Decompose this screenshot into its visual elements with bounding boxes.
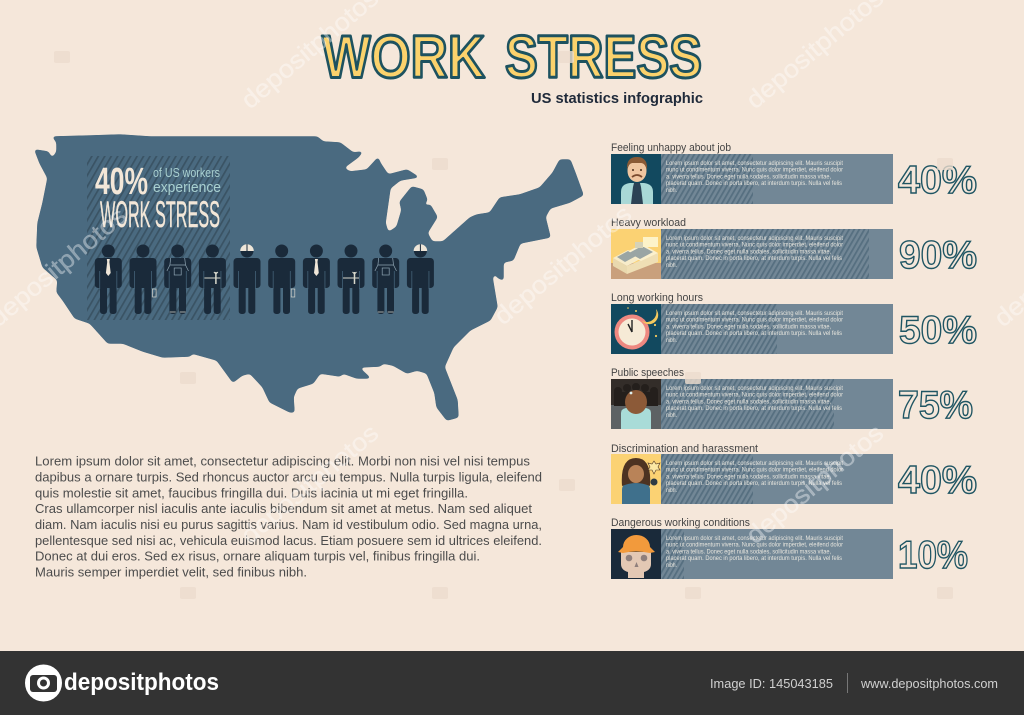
figure: worker with tools	[199, 244, 226, 314]
text block: body paragraph: quis molestie sit amet, faucibus fringilla dui. Duis lacinia ut mi eget fringilla.	[35, 485, 468, 500]
figure: worker in overalls	[164, 244, 191, 314]
text block: nibh.	[666, 337, 677, 344]
hatched share 50%	[661, 304, 777, 354]
panel: discrimination and harassment	[611, 443, 977, 504]
text block: nunc ut condimentum viverra. Nunc quis dolor imperdiet, eleifend dolor	[666, 317, 844, 324]
bar	[611, 454, 893, 504]
bar	[611, 154, 893, 204]
text block: Lorem ipsum dolor sit amet, consectetur adipiscing elit. Mauris suscipit	[666, 160, 843, 167]
value: 90%	[899, 234, 977, 277]
hatched share 90%	[661, 229, 869, 279]
bar	[611, 304, 893, 354]
text block: placerat quam. Donec in porta libero, at interdum turpis. Nulla vel felis	[666, 180, 842, 187]
worker figures row	[95, 244, 434, 314]
figure: office worker	[303, 244, 330, 314]
callout: experience: experience	[153, 179, 221, 196]
text block	[666, 160, 844, 194]
panel: long working hours	[611, 292, 977, 354]
text block: nibh.	[666, 487, 677, 494]
panel: public speeches	[611, 367, 973, 429]
text block: placerat quam. Donec in porta libero, at interdum turpis. Nulla vel felis	[666, 480, 842, 487]
value: 40%	[898, 459, 977, 502]
text block: nunc ut condimentum viverra. Nunc quis dolor imperdiet, eleifend dolor	[666, 392, 844, 399]
panel: heavy workload	[611, 217, 977, 279]
heading: Heavy workload	[611, 217, 686, 229]
text block: nibh.	[666, 262, 677, 269]
bar	[611, 529, 893, 579]
icon: sad office worker	[611, 154, 661, 204]
text block: placerat quam. Donec in porta libero, at interdum turpis. Nulla vel felis	[666, 330, 842, 337]
text block	[666, 310, 844, 344]
panel: dangerous working conditions	[611, 517, 968, 579]
title: WORK	[322, 24, 485, 90]
text block	[666, 385, 844, 419]
text block: Lorem ipsum dolor sit amet, consectetur adipiscing elit. Mauris suscipit	[666, 310, 843, 317]
footer bar	[0, 651, 1024, 715]
value: 50%	[899, 309, 977, 352]
icon: clock at night	[611, 304, 661, 354]
text block: body paragraph: dapibus a ornare turpis. Sed rhoncus auctor arcu eu tempus. Nulla turpis ligula, eleifend	[35, 470, 542, 484]
text block: nibh.	[666, 187, 677, 194]
text block: nunc ut condimentum viverra. Nunc quis dolor imperdiet, eleifend dolor	[666, 242, 844, 249]
value: 75%	[898, 384, 973, 427]
figure: worker with briefcase	[130, 244, 156, 314]
text block: Lorem ipsum dolor sit amet, consectetur adipiscing elit. Mauris suscipit	[666, 385, 843, 392]
title: STRESS	[505, 24, 702, 90]
figure: worker in hard hat	[234, 244, 260, 314]
text block: a. viverra tellus. Donec eget nulla sodales, sollicitudin massa vitae,	[666, 473, 831, 480]
text block: a. viverra tellus. Donec eget nulla sodales, sollicitudin massa vitae,	[666, 248, 831, 255]
map of the United States	[35, 135, 583, 420]
figure: worker in overalls	[372, 244, 399, 314]
hatched share 40%	[661, 454, 753, 504]
text block: a. viverra tellus. Donec eget nulla sodales, sollicitudin massa vitae,	[666, 548, 831, 555]
text block: body paragraph: pellentesque sed nisi ac, vehicula euismod lacus. Etiam posuere sem id ultrices eleifend.	[35, 533, 542, 548]
icon: paper stacks	[611, 229, 661, 279]
text block	[666, 535, 844, 569]
icon: harassed woman	[611, 454, 661, 504]
value: 10%	[898, 534, 968, 577]
subtitle: US statistics infographic	[531, 91, 703, 107]
heading: Dangerous working conditions	[611, 517, 750, 529]
text block: a. viverra tellus. Donec eget nulla sodales, sollicitudin massa vitae,	[666, 398, 831, 405]
text: WORK STRESS	[100, 194, 220, 235]
text block: Lorem ipsum dolor sit amet, consectetur adipiscing elit. Mauris suscipit	[666, 535, 843, 542]
panel: map callout	[87, 156, 230, 320]
panel: feeling unhappy about job	[611, 142, 977, 204]
text block: placerat quam. Donec in porta libero, at interdum turpis. Nulla vel felis	[666, 405, 842, 412]
text block	[666, 235, 844, 269]
text block: body paragraph: Mauris semper imperdiet velit, sed finibus nibh.	[35, 564, 307, 579]
watermarks: depositphotos	[741, 419, 889, 550]
text block: nunc ut condimentum viverra. Nunc quis dolor imperdiet, eleifend dolor	[666, 167, 844, 174]
text block: a. viverra tellus. Donec eget nulla sodales, sollicitudin massa vitae,	[666, 323, 831, 330]
text block: Lorem ipsum dolor sit amet, consectetur adipiscing elit. Mauris suscipit	[666, 460, 843, 467]
hatched share 40%	[661, 154, 753, 204]
text block: body paragraph: Donec at dui eros. Sed ex risus, ornare aliquam turpis vel, finibus fringilla dui.	[35, 549, 480, 564]
website: www.depositphotos.com	[860, 677, 998, 691]
text block: nunc ut condimentum viverra. Nunc quis dolor imperdiet, eleifend dolor	[666, 542, 844, 549]
figure: worker with tools	[338, 244, 364, 314]
icon: camera logo	[25, 664, 62, 702]
watermarks: depositphotos	[489, 200, 637, 331]
heading: Public speeches	[611, 367, 684, 379]
watermarks: depositphotos	[236, 419, 384, 550]
icon: speaker facing crowd	[611, 379, 661, 429]
text block: body paragraph: Lorem ipsum dolor sit amet, consectetur adipiscing elit. Morbi non nisi vel nisi tempus	[35, 454, 530, 468]
title	[322, 24, 702, 90]
text block: body paragraph	[35, 454, 542, 579]
text block: body paragraph: Cras ullamcorper nisl iaculis ante iaculis bibendum sit amet at metus. Nam sed aliquet	[35, 501, 532, 516]
callout: of US workers: of US workers	[153, 166, 220, 180]
image id: Image ID: 145043185	[710, 677, 833, 691]
hatched share 10%	[661, 529, 684, 579]
heading: Discrimination and harassment	[611, 443, 758, 455]
heading: Feeling unhappy about job	[611, 142, 731, 154]
text block: nibh.	[666, 412, 677, 419]
text block: body paragraph: diam. Nam iaculis nisi eu purus sagittis varius. Nam id vestibulum odio. Sed magna urna,	[35, 517, 542, 532]
watermarks	[0, 0, 1024, 550]
text block: placerat quam. Donec in porta libero, at interdum turpis. Nulla vel felis	[666, 255, 842, 262]
figure: worker in hard hat	[407, 244, 434, 314]
text block: nibh.	[666, 562, 677, 569]
text block: a. viverra tellus. Donec eget nulla sodales, sollicitudin massa vitae,	[666, 173, 831, 180]
text block: placerat quam. Donec in porta libero, at interdum turpis. Nulla vel felis	[666, 555, 842, 562]
figure: worker with briefcase	[268, 244, 295, 314]
logo wordmark: depositphotos	[64, 669, 219, 696]
text block: nunc ut condimentum viverra. Nunc quis dolor imperdiet, eleifend dolor	[666, 467, 844, 474]
value: 40%	[898, 159, 977, 202]
callout: 40% figure: 40%	[95, 161, 148, 203]
icon: skull with hard hat	[611, 529, 661, 579]
text block: Lorem ipsum dolor sit amet, consectetur adipiscing elit. Mauris suscipit	[666, 235, 843, 242]
bar	[611, 229, 893, 279]
watermark cameras	[54, 51, 953, 599]
hatched share 75%	[661, 379, 834, 429]
heading: Long working hours	[611, 292, 703, 304]
figure: office worker	[95, 244, 122, 314]
text block	[666, 460, 844, 494]
bar	[611, 379, 893, 429]
